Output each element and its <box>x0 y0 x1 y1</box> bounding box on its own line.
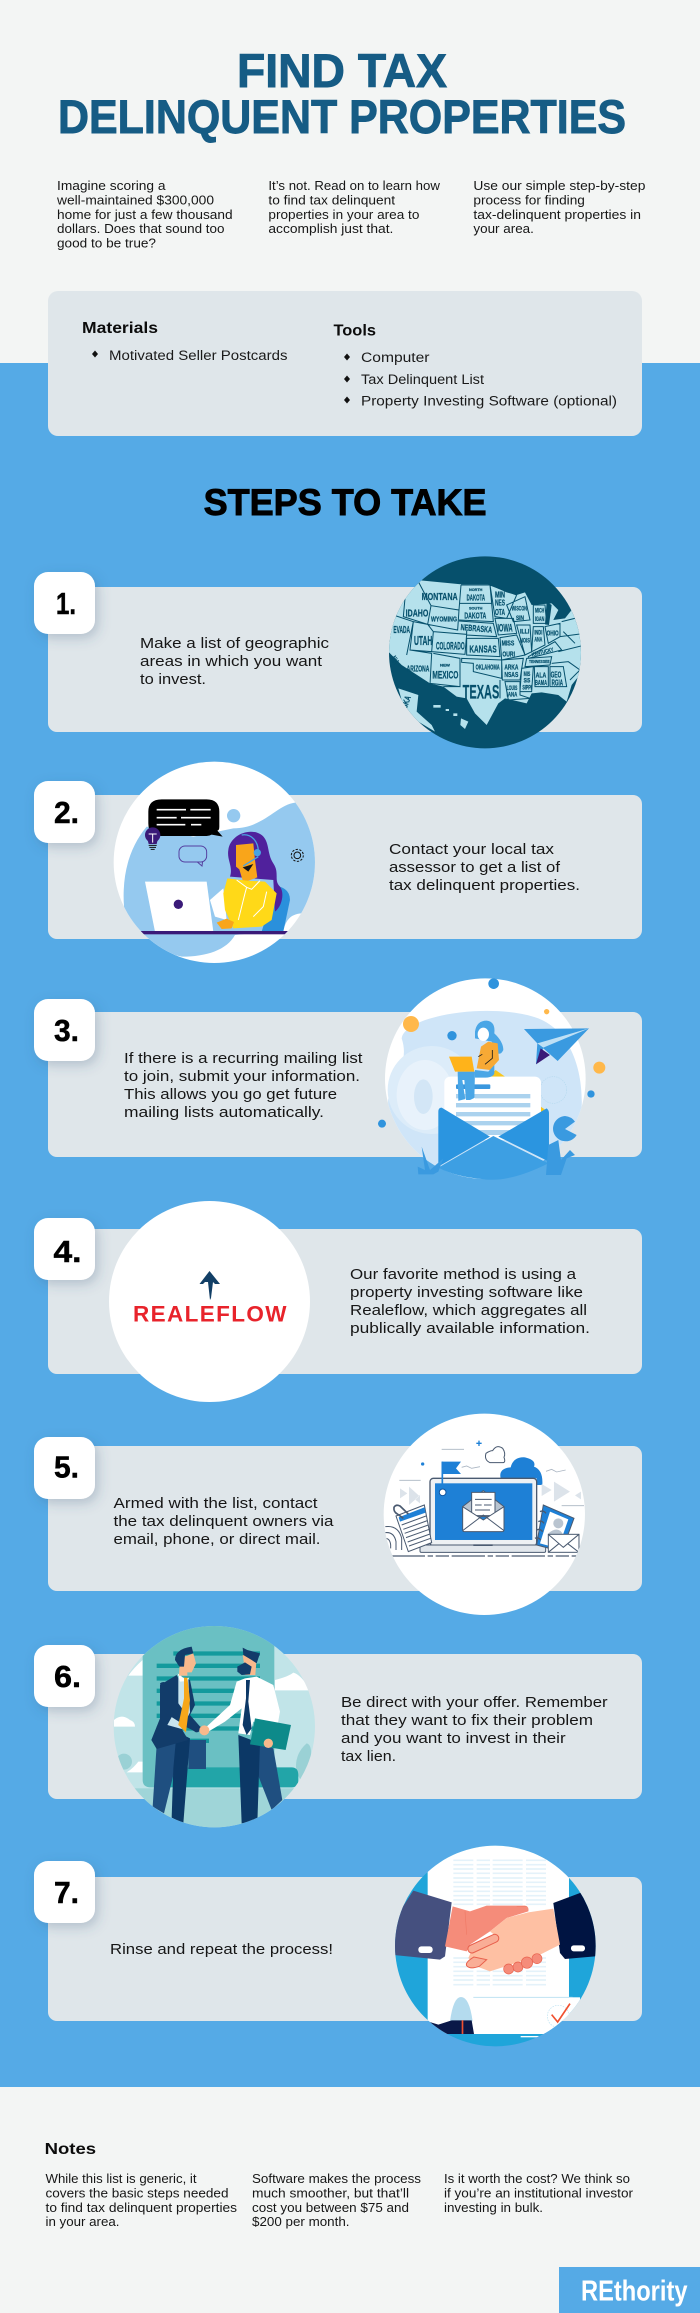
step 4 text: property investing software like <box>350 1285 583 1301</box>
step 6 text <box>341 1695 608 1765</box>
icon: two businessmen shaking hands <box>114 1626 315 1828</box>
state labels: OHIO <box>547 629 559 638</box>
state labels: OURI <box>502 649 515 658</box>
step 4 number: 4. <box>54 1235 82 1269</box>
step 6 <box>34 1622 642 1838</box>
step 3 text <box>124 1051 362 1121</box>
step 4 text <box>350 1267 590 1337</box>
step 5 <box>34 1414 642 1615</box>
envelope <box>438 1070 549 1180</box>
step 6 text: tax lien. <box>341 1749 396 1765</box>
state labels: COLORADO <box>436 640 465 652</box>
step 5 text: Armed with the list, contact <box>114 1496 318 1512</box>
step 3 text: mailing lists automatically. <box>124 1105 324 1121</box>
tools list: Tools <box>334 322 376 340</box>
state labels: INDI <box>534 630 543 636</box>
step 2 number: 2. <box>54 796 79 830</box>
state labels: SIN <box>516 615 524 622</box>
state labels: MIN <box>495 590 505 599</box>
state labels: IGAN <box>535 617 544 623</box>
state labels: MICH <box>535 608 544 614</box>
step 3 number: 3. <box>54 1014 79 1048</box>
state labels: OKLAHOMA <box>476 662 500 671</box>
state labels: TENNESSEE <box>529 659 550 665</box>
step 6 number: 6. <box>54 1660 81 1694</box>
state labels: NOIS <box>520 637 530 644</box>
step 5 badge <box>34 1437 95 1499</box>
state labels: UTAH <box>414 633 432 648</box>
state labels: KENTUCKY <box>531 647 554 658</box>
decorative dots <box>378 978 605 1128</box>
sleeve left <box>390 1891 452 1960</box>
notes: column 2 <box>252 2172 421 2229</box>
building <box>143 1622 298 1787</box>
plants <box>418 1116 577 1175</box>
notes heading: Notes <box>45 2141 96 2158</box>
step 2 text: Contact your local tax <box>389 842 555 858</box>
notes: column 2: Software makes the process <box>252 2172 421 2186</box>
clasped hands <box>445 1906 560 1974</box>
intro text: column 2: It’s not. Read on to learn how <box>268 179 441 193</box>
state labels: MEXICO <box>432 669 458 681</box>
state labels: NES <box>495 599 505 608</box>
intro text: column 1: well-maintained $300,000 <box>56 194 214 208</box>
state labels: ILLI <box>520 629 529 636</box>
state labels: MONTANA <box>422 592 458 603</box>
sleeve right <box>553 1892 596 1959</box>
icon: US states map <box>385 555 585 755</box>
icon: support agent with laptop <box>114 762 315 963</box>
step 7 badge <box>34 1861 95 1923</box>
clouds <box>485 1447 542 1485</box>
step 7 text: Rinse and repeat the process! <box>110 1942 333 1958</box>
title: FIND TAX <box>237 44 447 97</box>
state labels: NEW <box>440 664 451 668</box>
notes: column 3: if you’re an institutional investor <box>444 2186 633 2200</box>
light bulb <box>145 827 160 849</box>
step 7 number: 7. <box>54 1876 79 1910</box>
speech bubble <box>148 799 223 837</box>
notes: column 3 <box>444 2172 633 2215</box>
step 7 <box>34 1843 642 2056</box>
state labels: LOUIS <box>507 686 517 692</box>
notebook <box>535 1505 574 1552</box>
state labels: IANA <box>507 693 518 699</box>
step 5 text: the tax delinquent owners via <box>114 1514 335 1530</box>
step 6 text: and you want to invest in their <box>341 1731 566 1747</box>
state labels: ARIZONA <box>407 664 430 674</box>
state labels: SIPPI <box>522 685 532 691</box>
ground line <box>392 1555 576 1557</box>
state labels: IOWA <box>497 622 513 634</box>
tools list: Computer <box>361 350 430 365</box>
step 5 text: email, phone, or direct mail. <box>114 1532 320 1548</box>
step 2 badge <box>34 781 95 843</box>
state labels: NIA <box>388 654 401 666</box>
state labels: WYOMING <box>431 615 457 624</box>
intro text: column 1: dollars. Does that sound too <box>57 222 224 236</box>
logo arrow mark <box>200 1271 220 1300</box>
intro text: column 1: Imagine scoring a <box>57 179 166 193</box>
state labels: WISCON <box>512 606 527 613</box>
notes: column 2: $200 per month. <box>252 2215 350 2229</box>
paper plane <box>524 1028 589 1064</box>
step 3 text: If there is a recurring mailing list <box>124 1051 362 1067</box>
gear <box>291 849 303 861</box>
step 3 badge <box>34 999 95 1061</box>
state labels: NEBRASKA <box>460 622 493 635</box>
tools list: Property Investing Software (optional) <box>361 394 617 408</box>
notes: column 1: covers the basic steps needed <box>46 2186 228 2200</box>
state labels: NSAS <box>504 670 518 679</box>
clouds <box>114 1660 310 1772</box>
step 1 text: Make a list of geographic <box>140 636 329 652</box>
step 1 <box>34 555 642 755</box>
notes: column 3: investing in bulk. <box>444 2201 543 2215</box>
man with beard <box>207 1648 291 1823</box>
step 1 badge <box>34 572 95 634</box>
icon: envelope with person and paper plane <box>378 978 605 1180</box>
state labels: GEO <box>551 671 561 680</box>
step 4 <box>34 1201 642 1402</box>
notes: column 1 <box>46 2172 237 2229</box>
state labels: ANA <box>534 638 543 644</box>
intro text: column 3: tax-delinquent properties in <box>473 208 641 222</box>
icon: handshake over contract <box>395 1846 596 2046</box>
step 1 text <box>140 636 329 688</box>
intro text: column 1: good to be true? <box>57 236 156 250</box>
step 3 text: to join, submit your information. <box>124 1069 360 1085</box>
state labels: ARKA <box>504 662 519 671</box>
state labels: ALA <box>536 671 547 680</box>
step 2 <box>34 760 642 973</box>
step 4 text: Realeflow, which aggregates all <box>350 1303 587 1319</box>
notes: column 3: Is it worth the cost? We think so <box>444 2172 630 2186</box>
intro text: column 3: process for finding <box>473 194 585 208</box>
state labels: IDAHO <box>406 608 428 619</box>
logo: REthority <box>559 2267 700 2313</box>
step 1 text: to invest. <box>140 672 206 688</box>
step 2 text <box>389 842 580 894</box>
screen envelope <box>463 1491 504 1532</box>
state labels: NORTH <box>469 588 483 592</box>
step 4 text: publically available information. <box>350 1321 590 1337</box>
step 1 text: areas in which you want <box>140 654 322 670</box>
intro text: column 3 <box>473 179 645 236</box>
step 4 badge <box>34 1218 95 1280</box>
icon: laptop with email <box>384 1414 585 1615</box>
step 3 text: This allows you go get future <box>124 1087 337 1103</box>
title <box>58 44 626 143</box>
notes: column 1: to find tax delinquent properties <box>46 2201 237 2215</box>
state labels: SIS <box>524 679 530 685</box>
step 6 badge <box>34 1645 95 1707</box>
step 3 <box>34 978 642 1180</box>
materials list <box>82 320 288 363</box>
contract card <box>473 1997 580 2034</box>
step 5 number: 5. <box>54 1450 79 1484</box>
intro text: column 1: home for just a few thousand <box>57 208 233 222</box>
state labels: SKA <box>399 694 413 710</box>
intro text: column 2: properties in your area to <box>268 208 419 222</box>
man with orange tie <box>151 1647 202 1823</box>
tools list: Tax Delinquent List <box>361 372 484 387</box>
laptop <box>420 1478 546 1552</box>
notes: column 1: While this list is generic, it <box>46 2172 197 2186</box>
person with laptop <box>449 1021 503 1103</box>
intro text: column 3: your area. <box>473 222 534 236</box>
clipboard <box>385 1505 432 1552</box>
intro text: column 2: accomplish just that. <box>268 222 393 236</box>
state labels <box>388 588 563 710</box>
intro text: column 1 <box>56 179 233 250</box>
intro text: column 3: Use our simple step-by-step <box>473 179 645 193</box>
state labels: MISS <box>502 639 514 648</box>
state labels: TEXAS <box>463 682 499 703</box>
logo: Realeflow <box>109 1201 310 1402</box>
step 2 text: tax delinquent properties. <box>389 878 580 894</box>
intro text: column 2: to find tax delinquent <box>268 194 396 208</box>
notes: column 2: much smoother, but that’ll <box>252 2186 409 2200</box>
step 6 text: that they want to fix their problem <box>341 1713 593 1729</box>
state labels: BAMA <box>535 678 547 687</box>
materials list: Materials <box>82 320 158 337</box>
heading: steps to take: STEPS TO TAKE <box>204 482 487 523</box>
state labels: DAKOTA <box>464 610 487 620</box>
step 6 text: Be direct with your offer. Remember <box>341 1695 608 1711</box>
step 4 text: Our favorite method is using a <box>350 1267 577 1283</box>
state labels: OTA <box>495 608 505 617</box>
step 2 text: assessor to get a list of <box>389 860 561 876</box>
small envelope <box>548 1534 579 1552</box>
panel: materials and tools <box>48 291 642 436</box>
materials list: Motivated Seller Postcards <box>109 348 288 363</box>
step 5 text <box>114 1496 335 1548</box>
logo wordmark: REALEFLOW <box>133 1302 287 1326</box>
flag <box>439 1462 461 1496</box>
state labels: EVADA <box>393 625 410 636</box>
intro text: column 2 <box>268 179 441 236</box>
notes: column 1: in your area. <box>46 2215 120 2229</box>
state labels: DAKOTA <box>467 594 485 603</box>
tools list <box>334 322 617 408</box>
title: DELINQUENT PROPERTIES <box>58 90 626 143</box>
notes: column 2: cost you between $75 and <box>252 2201 409 2215</box>
state labels: KANSAS <box>469 645 497 656</box>
state labels: RGIA <box>552 679 563 688</box>
state labels: MIS <box>524 672 530 678</box>
state labels: SOUTH <box>469 606 483 610</box>
pen <box>428 1997 474 2034</box>
step 1 number: 1. <box>56 587 76 621</box>
